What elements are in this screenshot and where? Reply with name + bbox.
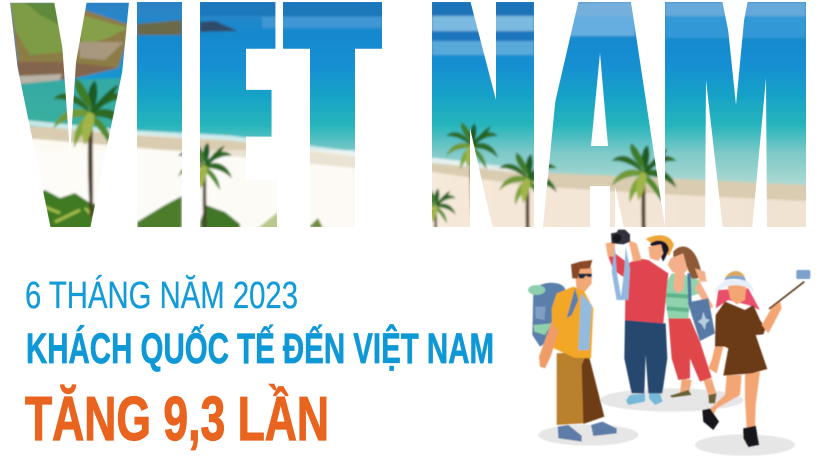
heading: tăng 9,3 lần: TĂNG 9,3 LẦN bbox=[25, 385, 329, 454]
photo: sea bbox=[0, 0, 825, 190]
photo: beach bbox=[28, 118, 806, 227]
photo: haze on horizon bbox=[200, 2, 806, 55]
person: woman with tote bag bbox=[663, 246, 717, 403]
heading: khách quốc tế đến Việt Nam: KHÁCH QUỐC TẾ ĐẾN VIỆT NAM bbox=[26, 324, 494, 373]
photo: beach scene bbox=[10, 2, 806, 227]
tote bag bbox=[687, 273, 715, 341]
person: man with camera bbox=[606, 230, 674, 405]
heading: 6 tháng năm 2023: 6 THÁNG NĂM 2023 bbox=[25, 274, 298, 317]
illustration: tourists bbox=[528, 230, 810, 456]
person: woman with selfie stick bbox=[702, 270, 810, 447]
photo: green shallows at left bbox=[21, 78, 121, 128]
photo: palm trees bbox=[52, 78, 678, 227]
photo: bushes bbox=[30, 190, 323, 230]
title: VIET NAM photo letters bbox=[10, 2, 806, 227]
person: backpack man bbox=[528, 260, 617, 442]
photo: rocky headland bbox=[10, 2, 238, 84]
ground shadows bbox=[538, 388, 795, 456]
